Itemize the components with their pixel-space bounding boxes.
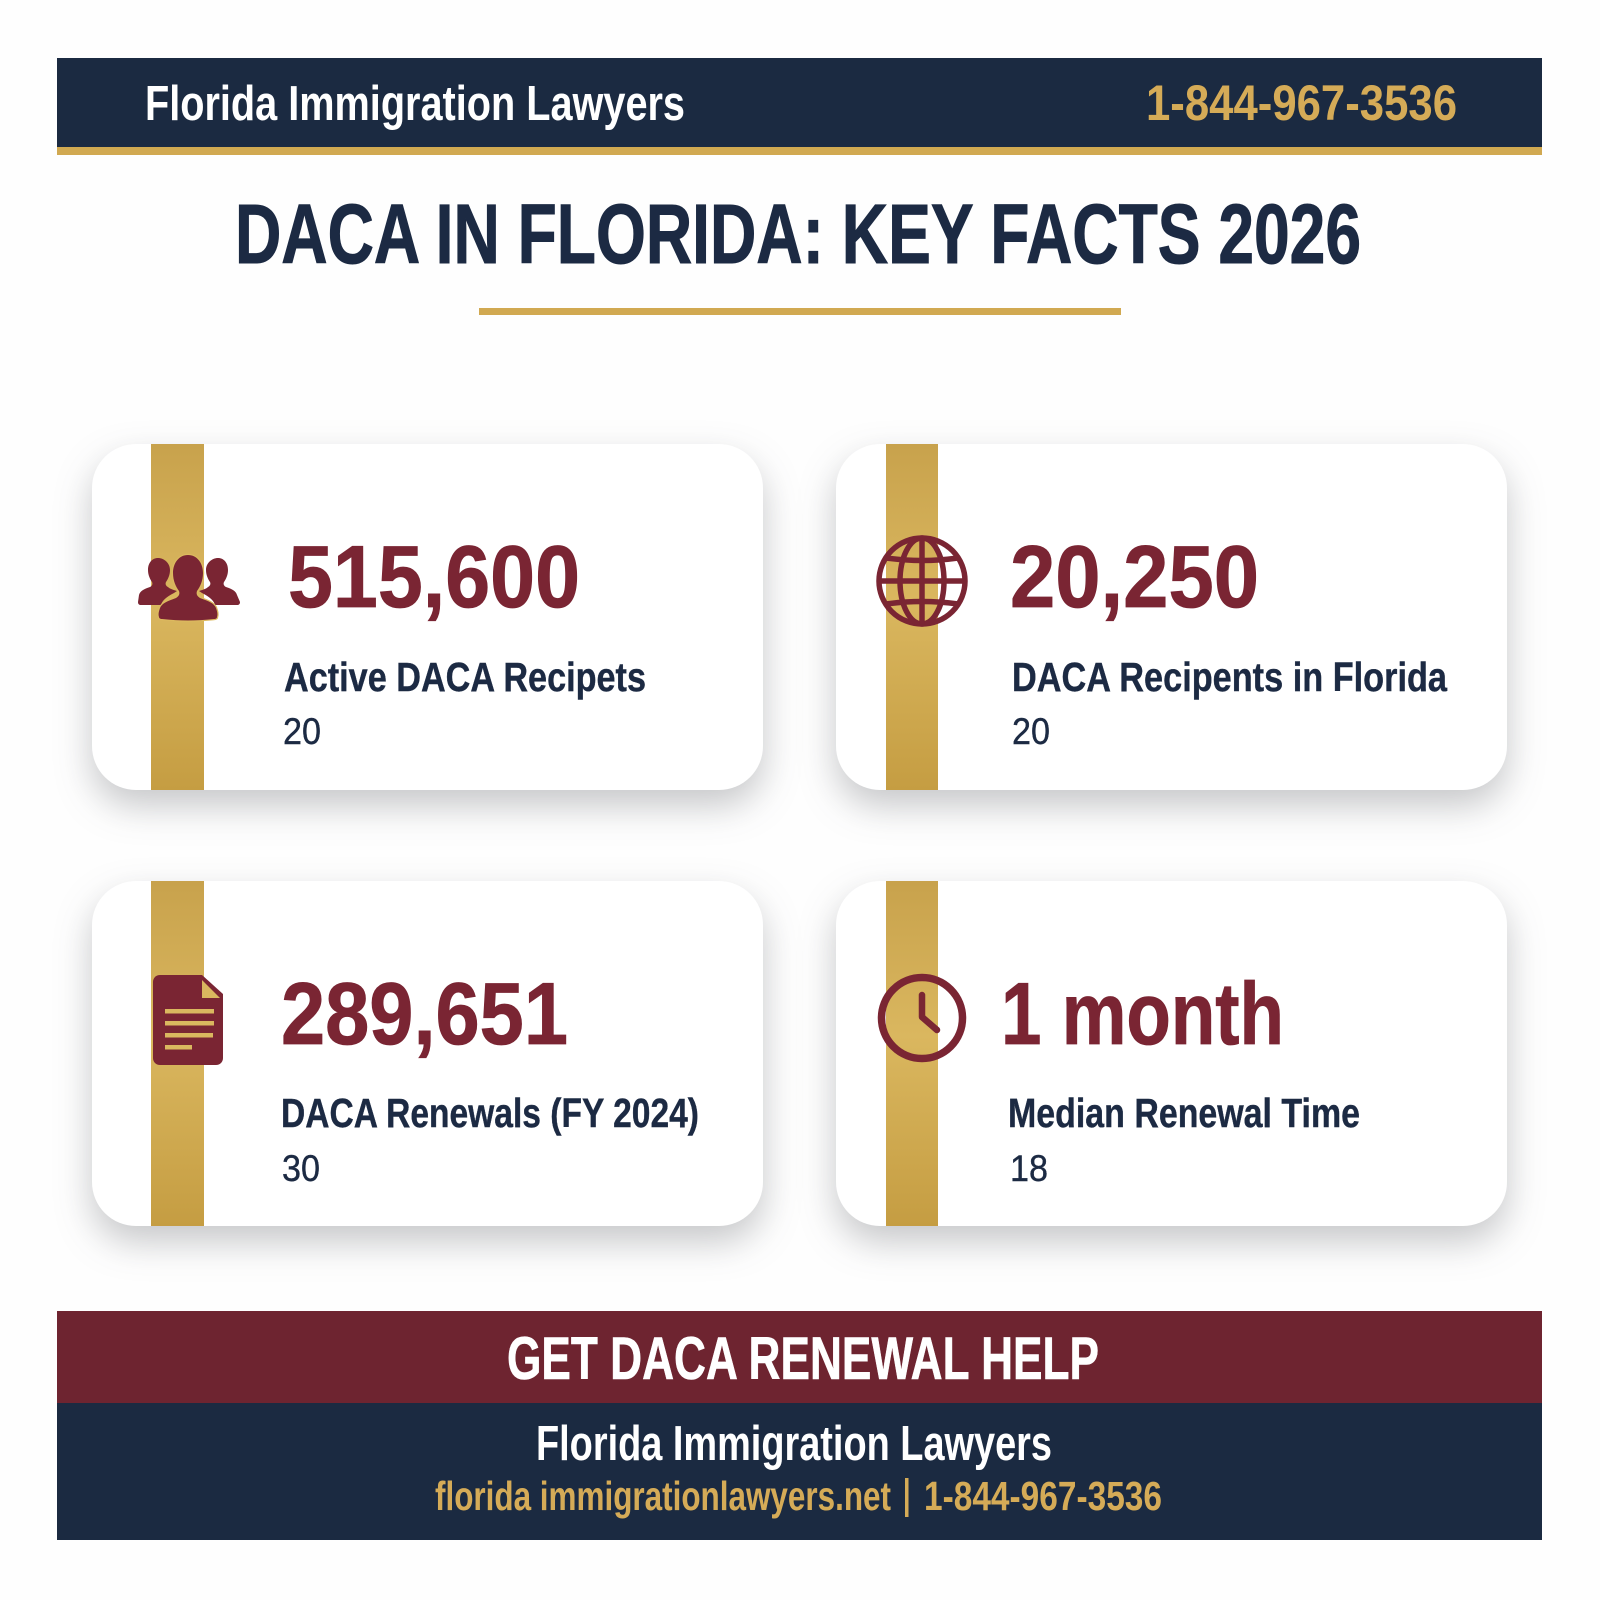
icon: document bbox=[153, 975, 223, 1065]
stat label: Active DACA Recipets bbox=[284, 654, 646, 700]
panel: DACA renewals bbox=[92, 881, 763, 1226]
contact firm name: Florida Immigration Lawyers bbox=[536, 1417, 1052, 1471]
contact website and phone: 1-844-967-3536 bbox=[924, 1473, 1162, 1519]
title underline bbox=[479, 308, 1121, 315]
panel: active DACA recipients bbox=[92, 444, 763, 790]
stat value: 20,250 bbox=[1010, 527, 1259, 626]
header bar bbox=[57, 58, 1542, 155]
call to action band bbox=[57, 1311, 1542, 1404]
stat label: DACA Recipents in Florida bbox=[1012, 654, 1448, 700]
stat label: Median Renewal Time bbox=[1008, 1090, 1360, 1136]
call to action heading: GET DACA RENEWAL HELP bbox=[507, 1325, 1099, 1392]
panel: median renewal time bbox=[836, 881, 1507, 1226]
header phone number: 1-844-967-3536 bbox=[1146, 75, 1457, 131]
icon: globe bbox=[879, 538, 965, 624]
contact band bbox=[57, 1403, 1542, 1540]
stat footnote: 20 bbox=[1012, 711, 1050, 752]
stat footnote: 30 bbox=[282, 1148, 320, 1189]
stat value: 289,651 bbox=[281, 964, 568, 1063]
icon: people bbox=[138, 555, 240, 620]
contact website and phone: florida immigrationlawyers.net bbox=[435, 1473, 891, 1519]
stat value: 1 month bbox=[1001, 964, 1284, 1063]
stat footnote: 18 bbox=[1010, 1148, 1048, 1189]
icon: clock bbox=[882, 978, 962, 1058]
stat footnote: 20 bbox=[283, 711, 321, 752]
stat value: 515,600 bbox=[288, 527, 580, 626]
stat label: DACA Renewals (FY 2024) bbox=[281, 1090, 699, 1136]
header firm name: Florida Immigration Lawyers bbox=[145, 77, 685, 131]
panel: DACA recipients in Florida bbox=[836, 444, 1507, 790]
